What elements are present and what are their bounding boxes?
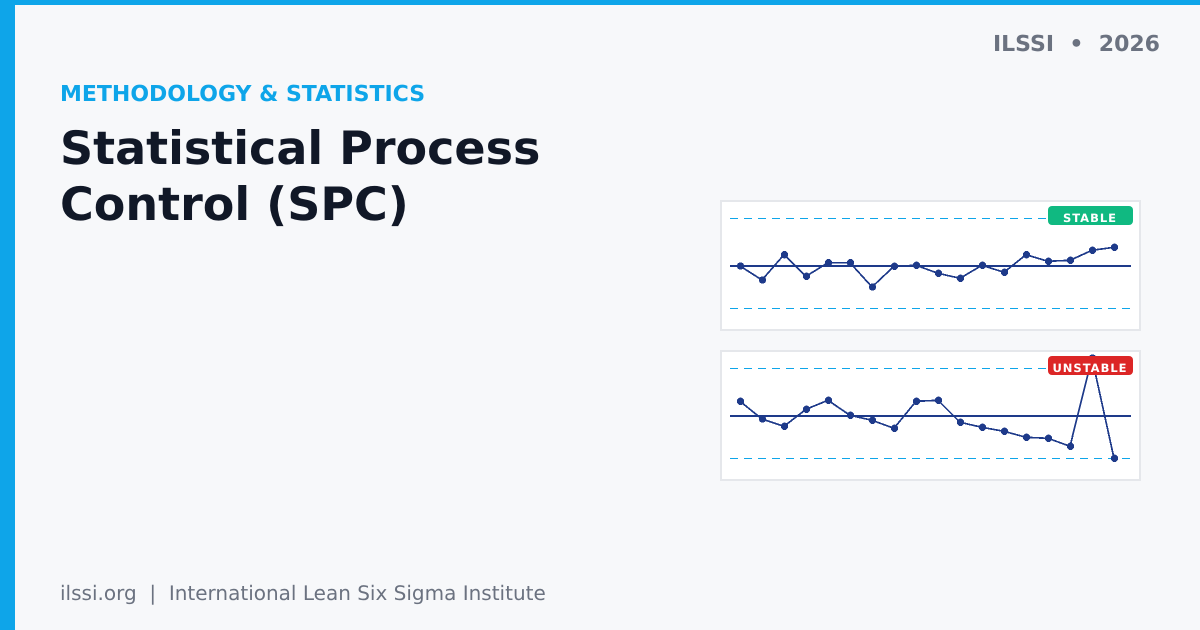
left accent bar xyxy=(0,0,15,630)
title: Control (SPC) xyxy=(60,177,409,231)
panel: unstable chart xyxy=(721,351,1140,480)
stable badge xyxy=(1048,206,1133,225)
stable data line xyxy=(740,247,1114,287)
top accent bar xyxy=(0,0,1200,5)
unstable data line xyxy=(740,358,1114,458)
panel: stable chart xyxy=(721,201,1140,330)
unstable data points xyxy=(737,354,1118,462)
category label: METHODOLOGY & STATISTICS xyxy=(60,82,425,107)
unstable badge: UNSTABLE xyxy=(1052,361,1128,375)
footer text: ilssi.org | International Lean Six Sigma Institute xyxy=(60,581,546,605)
stable badge: STABLE xyxy=(1063,211,1117,225)
title xyxy=(60,121,540,231)
stable data points xyxy=(737,244,1118,291)
unstable badge xyxy=(1048,356,1133,375)
brand label: ILSSI • 2026 xyxy=(993,32,1160,57)
title: Statistical Process xyxy=(60,121,540,175)
